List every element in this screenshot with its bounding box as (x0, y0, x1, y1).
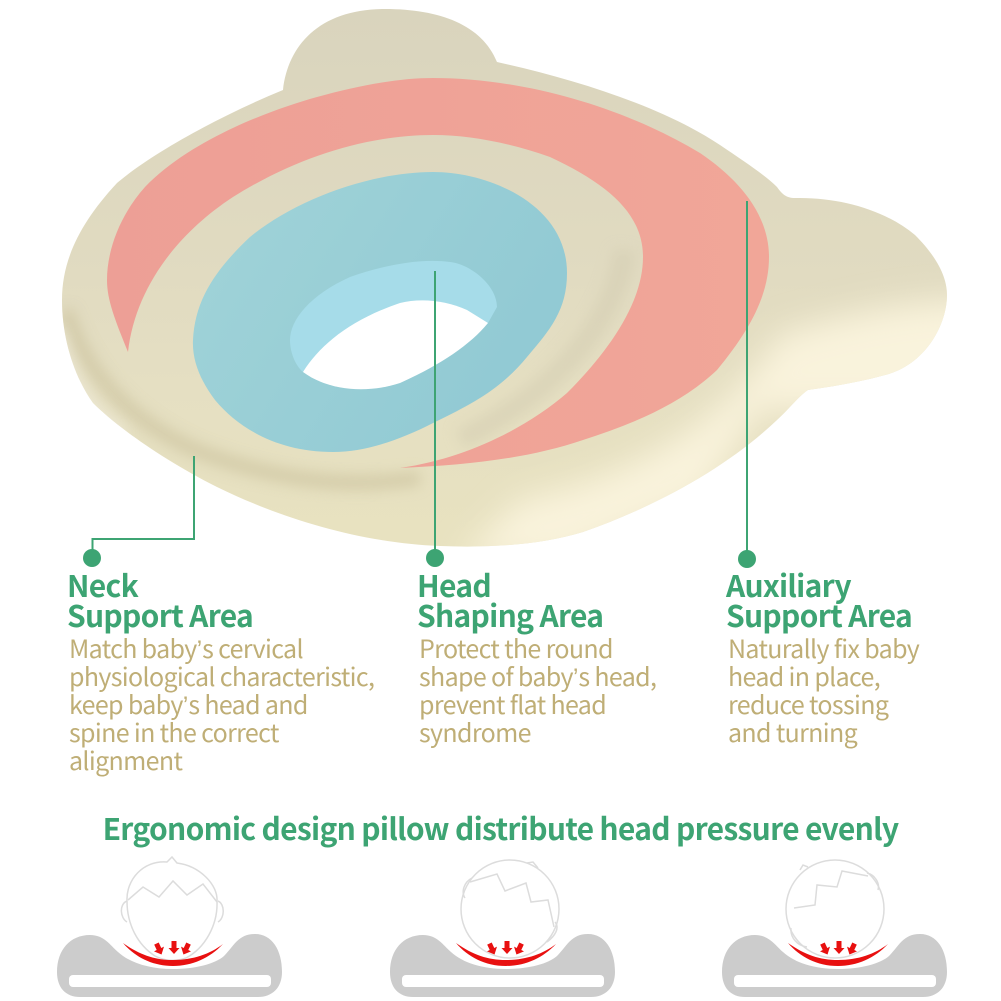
text: head: Protect the round (419, 630, 613, 666)
text: head (419, 630, 656, 750)
text: head: syndrome (419, 714, 531, 750)
heading: auxiliary: Support Area (726, 592, 912, 636)
text: neck: alignment (69, 742, 182, 778)
leader line: auxiliary (746, 201, 748, 558)
marker: auxiliary (738, 550, 756, 568)
text: head: shape of baby’s head, (419, 658, 656, 694)
heading: head: Head (417, 562, 491, 606)
text: neck: Match baby’s cervical (69, 630, 303, 666)
heading: auxiliary (726, 562, 912, 636)
text: neck (69, 630, 374, 778)
text: auxiliary (728, 630, 920, 750)
text: auxiliary: and turning (728, 714, 857, 750)
heading: head: Shaping Area (417, 592, 603, 636)
text: auxiliary: reduce tossing (728, 686, 888, 722)
title: Ergonomic design pillow distribute head pressure evenly (103, 805, 898, 849)
pillow illustration (58, 9, 980, 560)
heading: neck (67, 562, 253, 636)
marker: head (426, 549, 444, 567)
pillow hole (303, 300, 488, 389)
marker: neck (83, 549, 101, 567)
pillow shading (62, 289, 947, 546)
auxiliary support area (107, 78, 769, 468)
text: neck: keep baby’s head and (69, 686, 308, 722)
text: neck: physiological characteristic, (69, 658, 374, 694)
hole inner wall (290, 261, 497, 383)
text: head: prevent flat head (419, 686, 606, 722)
heading: neck: Support Area (67, 592, 253, 636)
text: auxiliary: head in place, (728, 658, 880, 694)
diagram: head tilted right (390, 860, 615, 997)
text: neck: spine in the correct (69, 714, 279, 750)
leader line: head (434, 271, 436, 558)
heading: auxiliary: Auxiliary (726, 562, 851, 606)
leader line: neck (92, 456, 194, 558)
pillow body (62, 9, 947, 547)
heading: head (417, 562, 603, 636)
diagram: head tilted left (722, 860, 947, 997)
text: auxiliary: Naturally fix baby (728, 630, 919, 666)
heading: neck: Neck (67, 562, 138, 606)
diagram: head centered (57, 857, 282, 997)
head shaping area (193, 172, 567, 452)
